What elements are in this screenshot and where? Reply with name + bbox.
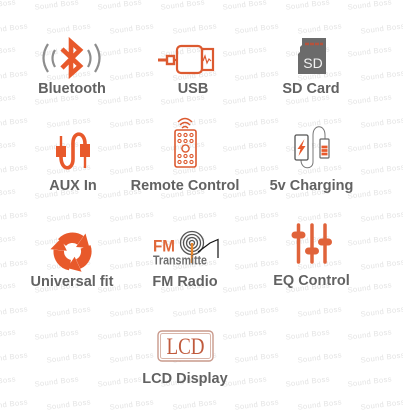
icon: LCD badge: LCD: [166, 334, 204, 359]
label: USB: USB: [178, 81, 208, 97]
icon: FM transmitter: Transmitte: [153, 252, 207, 268]
infographic: feature icons grid: Sound Boss: [297, 21, 342, 36]
infographic: feature icons grid: Sound Boss: [97, 280, 142, 295]
feature: 5v Charging: [270, 127, 353, 194]
infographic: feature icons grid: Sound Boss: [46, 115, 91, 130]
icon: micro SD card: SD: [303, 55, 323, 71]
infographic: feature icons grid: Sound Boss: [46, 21, 91, 36]
infographic: feature icons grid: Sound Boss: [160, 139, 205, 154]
infographic: feature icons grid: Sound Boss: [46, 209, 91, 224]
infographic: feature icons grid: Sound Boss: [109, 68, 154, 83]
infographic: feature icons grid: Sound Boss: [160, 233, 205, 248]
infographic: feature icons grid: Sound Boss: [234, 115, 279, 130]
infographic: feature icons grid: Sound Boss: [285, 139, 330, 154]
infographic: feature icons grid: Sound Boss: [234, 162, 279, 177]
infographic: feature icons grid: Sound Boss: [222, 186, 267, 201]
icon: USB plug: [158, 46, 213, 73]
infographic: feature icons grid: Sound Boss: [347, 374, 392, 389]
infographic: feature icons grid: Sound Boss: [172, 350, 217, 365]
infographic: feature icons grid: Sound Boss: [222, 139, 267, 154]
infographic: feature icons grid: Sound Boss: [109, 350, 154, 365]
infographic: feature icons grid: Sound Boss: [285, 374, 330, 389]
infographic: feature icons grid: Sound Boss: [297, 304, 342, 319]
infographic: feature icons grid: Sound Boss: [297, 115, 342, 130]
label: AUX In: AUX In: [49, 178, 97, 194]
infographic: feature icons grid: Sound Boss: [34, 280, 79, 295]
infographic: feature icons grid: Sound Boss: [222, 92, 267, 107]
infographic: feature icons grid: Sound Boss: [347, 327, 392, 342]
label: Bluetooth: Bluetooth: [38, 81, 106, 97]
infographic: feature icons grid: Sound Boss: [34, 233, 79, 248]
infographic: feature icons grid: Sound Boss: [46, 257, 91, 272]
label: 5v Charging: 5v Charging: [270, 178, 353, 194]
infographic: feature icons grid: Sound Boss: [222, 374, 267, 389]
icon: audio cable: [56, 134, 90, 168]
icon: phone and power bank: [295, 127, 329, 168]
infographic: feature icons grid: Sound Boss: [297, 68, 342, 83]
infographic: feature icons grid: Sound Boss: [34, 327, 79, 342]
infographic: feature icons grid: Sound Boss: [222, 327, 267, 342]
infographic: feature icons grid: Sound Boss: [46, 68, 91, 83]
infographic: feature icons grid: Sound Boss: [46, 350, 91, 365]
infographic: feature icons grid: Sound Boss: [297, 257, 342, 272]
infographic: feature icons grid: Sound Boss: [347, 92, 392, 107]
feature: LCD Display: [142, 331, 228, 387]
infographic: feature icons grid: Sound Boss: [160, 186, 205, 201]
infographic: feature icons grid: Sound Boss: [347, 44, 392, 59]
infographic: feature icons grid: Sound Boss: [222, 280, 267, 295]
infographic: feature icons grid: Sound Boss: [234, 209, 279, 224]
infographic: feature icons grid: Sound Boss: [234, 257, 279, 272]
infographic: feature icons grid: Sound Boss: [285, 233, 330, 248]
infographic: feature icons grid: Sound Boss: [172, 209, 217, 224]
infographic: feature icons grid: Sound Boss: [172, 304, 217, 319]
infographic: feature icons grid: Sound Boss: [172, 21, 217, 36]
label: Universal fit: Universal fit: [30, 274, 114, 290]
infographic: feature icons grid: Sound Boss: [34, 186, 79, 201]
infographic: feature icons grid: Sound Boss: [234, 68, 279, 83]
label: EQ Control: EQ Control: [273, 273, 350, 289]
infographic: feature icons grid: Sound Boss: [46, 162, 91, 177]
icon: remote control: [175, 118, 196, 167]
infographic: feature icons grid: Sound Boss: [234, 350, 279, 365]
feature: FM Radio: [152, 232, 218, 290]
infographic: feature icons grid: Sound Boss: [172, 162, 217, 177]
infographic: feature icons grid: Sound Boss: [97, 92, 142, 107]
infographic: feature icons grid: Sound Boss: [97, 327, 142, 342]
feature: Remote Control: [131, 118, 239, 194]
infographic: feature icons grid: Sound Boss: [97, 139, 142, 154]
infographic: feature icons grid: Sound Boss: [297, 209, 342, 224]
feature: Bluetooth: [38, 42, 106, 97]
icon: bluetooth rune with signal arcs: [44, 42, 100, 74]
infographic: feature icons grid: Sound Boss: [285, 44, 330, 59]
infographic: feature icons grid: Sound Boss: [285, 280, 330, 295]
icon: FM transmitter: FM: [153, 236, 175, 256]
infographic: feature icons grid: Sound Boss: [347, 233, 392, 248]
infographic: feature icons grid: Sound Boss: [34, 44, 79, 59]
infographic: feature icons grid: Sound Boss: [97, 186, 142, 201]
feature: USB: [158, 46, 213, 97]
feature: Universal fit: [30, 234, 114, 290]
label: FM Radio: FM Radio: [152, 274, 218, 290]
icon: equalizer sliders: [292, 225, 332, 262]
infographic: feature icons grid: Sound Boss: [109, 115, 154, 130]
infographic: feature icons grid: Sound Boss: [285, 186, 330, 201]
infographic: feature icons grid: Sound Boss: [172, 68, 217, 83]
infographic: feature icons grid: Sound Boss: [109, 21, 154, 36]
infographic: feature icons grid: Sound Boss: [34, 92, 79, 107]
infographic: feature icons grid: Sound Boss: [34, 139, 79, 154]
infographic: feature icons grid: Sound Boss: [160, 374, 205, 389]
infographic: feature icons grid: Sound Boss: [109, 257, 154, 272]
infographic: feature icons grid: Sound Boss: [347, 139, 392, 154]
infographic: feature icons grid: Sound Boss: [160, 280, 205, 295]
infographic: feature icons grid: Sound Boss: [109, 162, 154, 177]
infographic: feature icons grid: Sound Boss: [222, 44, 267, 59]
infographic: feature icons grid: Sound Boss: [172, 115, 217, 130]
infographic: feature icons grid: Sound Boss: [97, 44, 142, 59]
label: Remote Control: Remote Control: [131, 178, 239, 194]
infographic: feature icons grid: Sound Boss: [97, 374, 142, 389]
infographic: feature icons grid: Sound Boss: [109, 397, 154, 412]
infographic: feature icons grid: Sound Boss: [172, 257, 217, 272]
infographic: feature icons grid: Sound Boss: [285, 327, 330, 342]
icon: recycling arrows: [48, 234, 93, 275]
infographic: feature icons grid: Sound Boss: [234, 304, 279, 319]
infographic: feature icons grid: Sound Boss: [297, 162, 342, 177]
feature: EQ Control: [273, 225, 350, 289]
infographic: feature icons grid: Sound Boss: [347, 280, 392, 295]
icon: FM transmitter: [153, 232, 218, 268]
feature: AUX In: [49, 134, 97, 194]
feature: SD Card: [282, 38, 340, 97]
infographic: feature icons grid: Sound Boss: [34, 374, 79, 389]
infographic: feature icons grid: Sound Boss: [172, 397, 217, 412]
infographic: feature icons grid: Sound Boss: [109, 209, 154, 224]
label: LCD Display: LCD Display: [142, 371, 228, 387]
label: SD Card: SD Card: [282, 81, 340, 97]
infographic: feature icons grid: Sound Boss: [160, 92, 205, 107]
infographic: feature icons grid: Sound Boss: [285, 92, 330, 107]
infographic: feature icons grid: Sound Boss: [46, 304, 91, 319]
infographic: feature icons grid: Sound Boss: [347, 186, 392, 201]
infographic: feature icons grid: Sound Boss: [46, 397, 91, 412]
infographic: feature icons grid: Sound Boss: [234, 21, 279, 36]
infographic: feature icons grid: Sound Boss: [297, 397, 342, 412]
infographic: feature icons grid: Sound Boss: [234, 397, 279, 412]
infographic: feature icons grid: Sound Boss: [160, 327, 205, 342]
infographic: feature icons grid: Sound Boss: [160, 44, 205, 59]
infographic: feature icons grid: Sound Boss: [109, 304, 154, 319]
infographic: feature icons grid: Sound Boss: [222, 233, 267, 248]
infographic: feature icons grid: Sound Boss: [97, 233, 142, 248]
infographic: feature icons grid: Sound Boss: [297, 350, 342, 365]
